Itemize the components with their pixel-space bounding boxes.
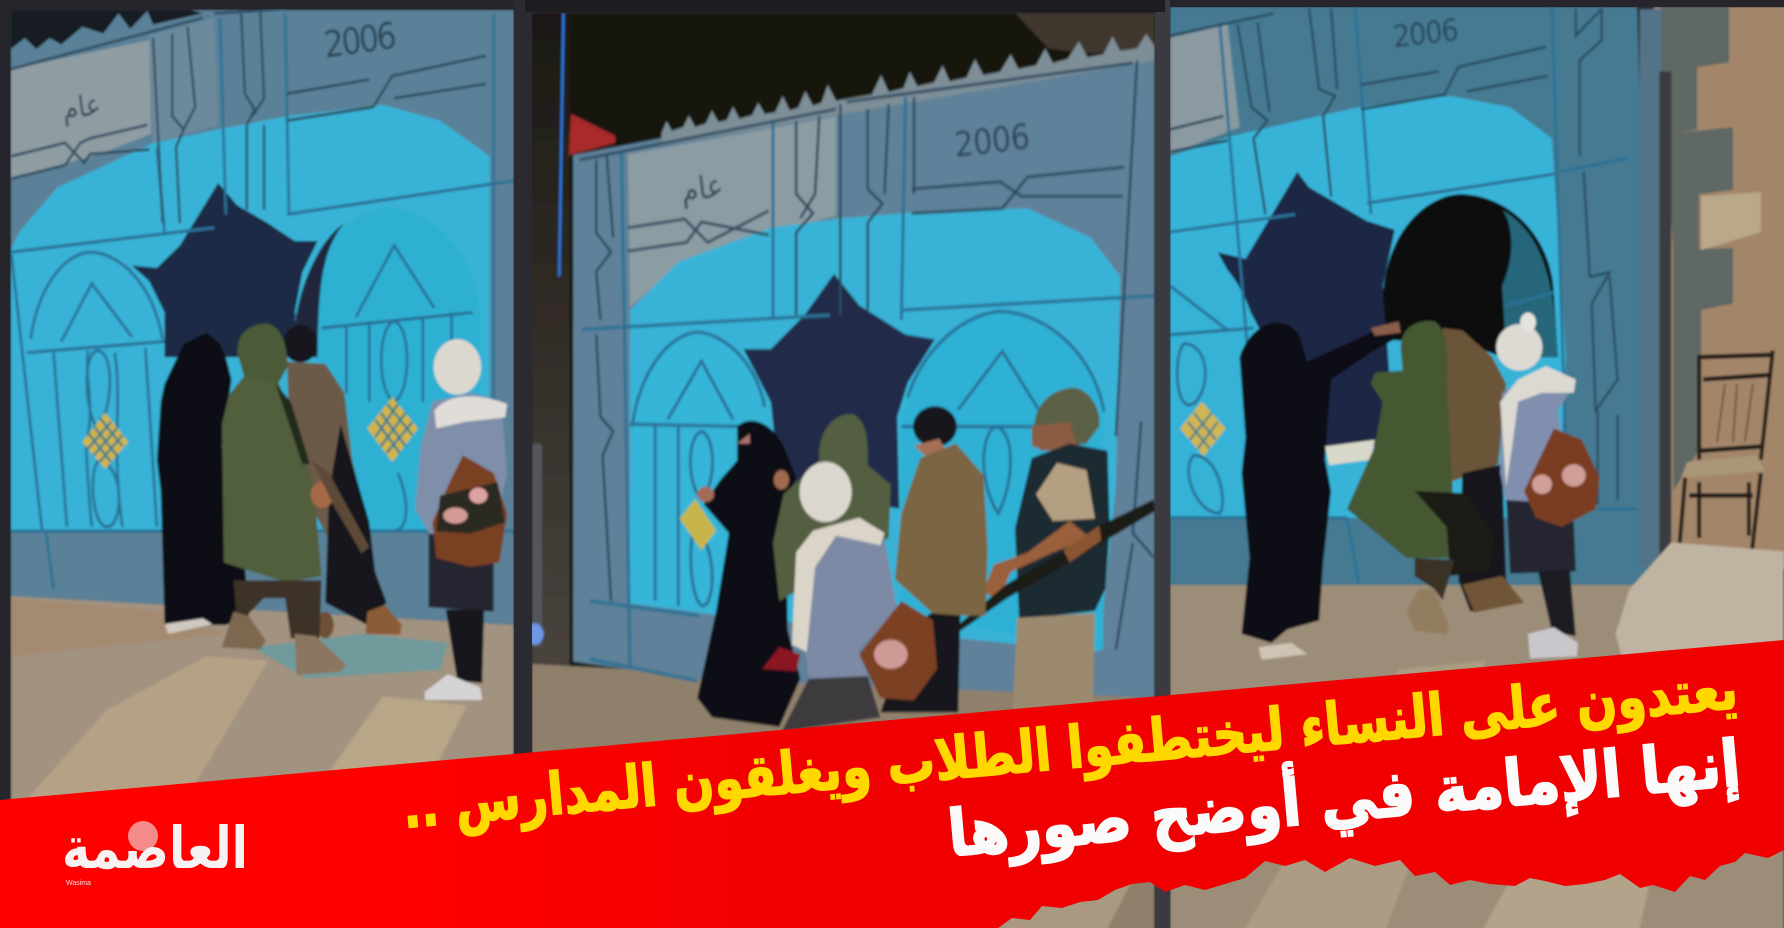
girl with backpack — [1496, 312, 1600, 658]
girl with backpack — [762, 462, 937, 732]
dark doorway — [1383, 194, 1558, 357]
panel: right photo — [1170, 7, 1784, 928]
logo — [62, 814, 248, 887]
ground — [532, 664, 1155, 928]
ground — [11, 596, 514, 804]
left video widget — [532, 442, 546, 648]
logo wordmark: العاصمة — [62, 814, 248, 882]
panel: left photo — [11, 9, 514, 804]
dark building backdrop — [569, 13, 1103, 669]
diamond ornaments — [82, 397, 418, 469]
soldier in green — [1347, 321, 1494, 635]
navy star shadow — [132, 183, 318, 357]
divider between photos — [514, 0, 1170, 928]
white and stripe patch — [1325, 440, 1375, 465]
chair seat — [1681, 455, 1765, 478]
chair — [1678, 350, 1773, 560]
right arch — [295, 208, 480, 531]
dark roof spikes — [11, 10, 203, 49]
gate spikes — [661, 34, 1155, 145]
logo globe — [128, 821, 158, 851]
man in brown jacket — [880, 406, 988, 713]
person behind — [283, 325, 402, 638]
man in brown behind — [1443, 328, 1524, 612]
painted cyan dome — [630, 208, 1120, 652]
drain pipe — [1639, 9, 1661, 567]
woman in black — [697, 421, 800, 727]
left arch — [1170, 241, 1255, 518]
red flag — [569, 114, 615, 155]
logo tagline: Wasima — [66, 880, 91, 887]
diamond ornament — [680, 499, 716, 550]
year text on gate: 2006 — [322, 14, 399, 67]
gate — [573, 48, 1155, 698]
year text on gate: 2006 — [1391, 11, 1460, 55]
diamond ornament — [1180, 402, 1226, 456]
step — [1616, 542, 1784, 656]
stone corner blocks — [1661, 7, 1733, 491]
grey upper panel — [11, 40, 151, 179]
gate — [11, 10, 514, 625]
navy star shadow — [744, 274, 935, 509]
year text on gate: 2006 — [953, 116, 1032, 166]
arabic word on gate: عام — [61, 88, 103, 127]
painted cyan dome — [1170, 96, 1566, 518]
armed man — [943, 388, 1155, 713]
wall — [1653, 7, 1784, 569]
grey upper panel — [1170, 25, 1240, 154]
woman in black — [1240, 321, 1401, 660]
arabic word on gate: عام — [679, 167, 725, 211]
gate — [1170, 7, 1651, 585]
gate bars — [1170, 7, 1637, 585]
woman in black — [157, 333, 249, 634]
navy star shadow — [1218, 172, 1395, 446]
centre-left arch — [707, 422, 762, 608]
painted cyan dome — [11, 105, 490, 531]
blue scrollbar line — [559, 13, 563, 276]
red headline banner with torn edge — [0, 640, 1784, 928]
ground — [1170, 558, 1784, 928]
grey upper panel — [628, 116, 836, 308]
centre-right arch — [901, 310, 1103, 649]
soldier in green behind — [773, 414, 891, 601]
panel: centre photo — [525, 13, 1155, 928]
gate bars — [11, 13, 514, 589]
gate bars — [582, 97, 1155, 681]
soldier in green — [222, 324, 369, 675]
girl with backpack — [415, 339, 507, 700]
